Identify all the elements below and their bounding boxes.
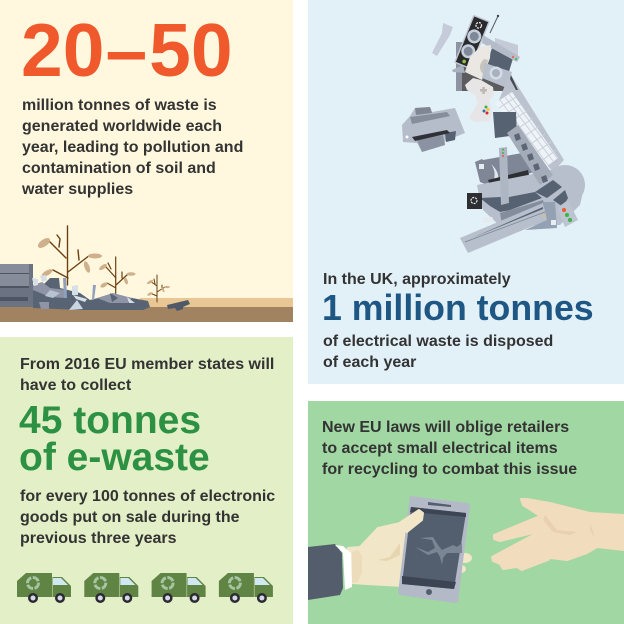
icon: recycling truck 2: [84, 573, 138, 603]
fingertips behind phone: [456, 553, 472, 573]
text: worldwide waste description: million tonnes of waste is: [22, 97, 217, 114]
text: UK intro: In the UK, approximately: [323, 271, 511, 288]
thumb: [398, 510, 423, 532]
headline: 45 tonnes of e-waste: 45 tonnes: [19, 399, 201, 442]
tablet: [493, 112, 517, 138]
vertical remote: [499, 147, 509, 205]
text: worldwide waste description: contamination of soil and: [22, 160, 216, 177]
text: EU description: [20, 488, 275, 547]
dead trees: [48, 226, 165, 302]
dark cable shapes: [535, 180, 562, 198]
text: retailer laws: for recycling to combat this issue: [322, 461, 577, 478]
big number: 20–50: 20–50: [21, 8, 233, 92]
bracket: [525, 202, 557, 230]
text: retailer laws: New EU laws will oblige retailers: [322, 419, 569, 436]
text: UK description: of each year: [323, 354, 416, 371]
headline: 1 million tonnes: 1 million tonnes: [322, 288, 594, 328]
text: EU intro: have to collect: [20, 377, 132, 394]
keyboard: [497, 75, 564, 172]
headline: 45 tonnes of e-waste: of e-waste: [19, 436, 210, 479]
shirt cuff: [335, 545, 352, 590]
icons: recycling trucks: [17, 573, 273, 603]
text: EU description: for every 100 tonnes of electronic: [20, 488, 275, 505]
printer: [402, 107, 465, 152]
game controller: [465, 78, 494, 122]
suit sleeve: [308, 544, 343, 600]
speaker: [454, 15, 490, 69]
text: worldwide waste description: year, leading to pollution and: [22, 139, 243, 156]
container: [0, 264, 33, 307]
text: UK description: [323, 333, 553, 371]
status light block: [557, 200, 578, 227]
radio antenna: [490, 16, 498, 33]
music player: [482, 63, 512, 88]
rubble pile: [33, 278, 150, 310]
icon: recycling truck 3: [152, 573, 206, 603]
text: EU description: goods put on sale during the: [20, 509, 240, 526]
text: retailer laws: [322, 419, 577, 478]
text: worldwide waste description: water supplies: [21, 181, 133, 198]
speaker stand: [452, 65, 465, 73]
panel: EU collection target: [0, 337, 293, 624]
panel: worldwide waste: [0, 0, 293, 322]
text: EU intro: From 2016 EU member states will: [20, 356, 274, 373]
text: UK description: of electrical waste is disposed: [323, 333, 553, 350]
panel: EU retailer laws: [308, 401, 624, 624]
backing box: [456, 42, 517, 91]
icon: recycling truck 1: [17, 573, 71, 603]
holding hand: [348, 510, 423, 587]
screen crack: [415, 537, 462, 565]
torch: [432, 23, 453, 56]
text: worldwide waste description: generated worldwide each: [22, 118, 222, 135]
white device: [465, 45, 491, 80]
text: EU intro: [20, 356, 274, 394]
lower device stack: [475, 152, 534, 186]
broken debris: [167, 300, 190, 311]
panel: UK electrical waste: [308, 0, 624, 384]
tree leaves: [36, 236, 170, 296]
text: EU description: previous three years: [20, 530, 177, 547]
ethernet hub strip: [507, 125, 553, 185]
icon: recycling truck 4: [219, 573, 273, 603]
open hand: [492, 499, 624, 570]
text: retailer laws: to accept small electrical items: [322, 440, 558, 457]
phone: [398, 496, 470, 603]
text: worldwide waste description: [21, 97, 243, 198]
illustration: landfill scene: [0, 226, 293, 322]
illustration: UK map of electrical devices: [402, 15, 585, 253]
phone speaker and button: [428, 502, 451, 507]
illustration: hand holding broken phone: [308, 496, 624, 603]
radio: [495, 38, 518, 58]
scanner bar: [460, 203, 547, 253]
headline: 45 tonnes of e-waste: [19, 399, 210, 479]
